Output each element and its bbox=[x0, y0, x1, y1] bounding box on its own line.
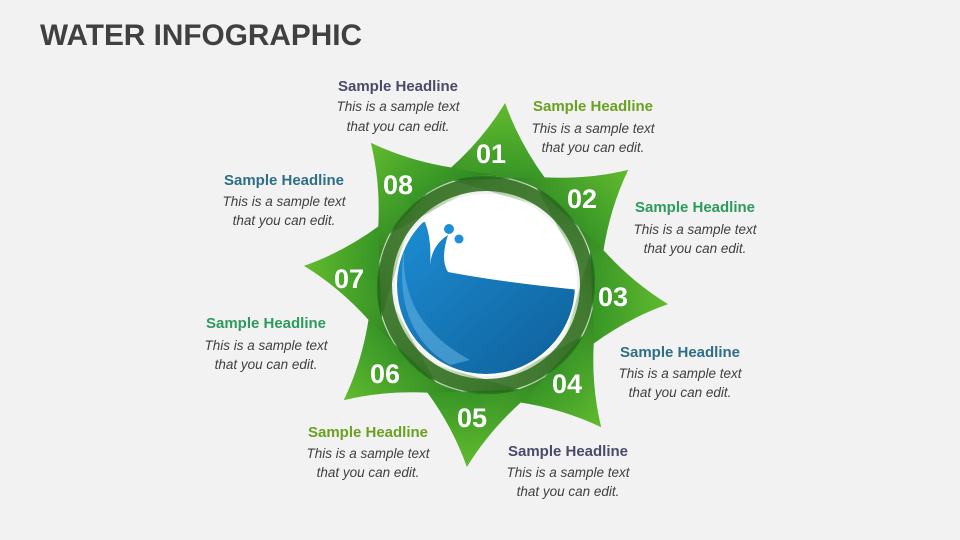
text block 06: that you can edit. bbox=[317, 465, 419, 480]
text block 07 bbox=[204, 315, 329, 372]
text block 03: Sample Headline bbox=[635, 199, 755, 216]
text block 06: This is a sample text bbox=[306, 446, 431, 461]
text block 07: This is a sample text bbox=[204, 338, 329, 353]
text block 06 bbox=[306, 424, 431, 480]
text block 04 bbox=[618, 344, 743, 400]
numbers: 08 bbox=[383, 170, 413, 200]
text block 01: Sample Headline bbox=[338, 78, 458, 95]
text block 05: Sample Headline bbox=[508, 443, 628, 460]
text block 01 bbox=[336, 78, 461, 134]
text block 08 bbox=[222, 172, 347, 228]
text block 01: This is a sample text bbox=[336, 99, 461, 114]
numbers: 02 bbox=[567, 184, 597, 214]
numbers: 06 bbox=[370, 359, 400, 389]
text block 04: This is a sample text bbox=[618, 366, 743, 381]
text block 08: This is a sample text bbox=[222, 194, 347, 209]
star graphic bbox=[292, 91, 680, 479]
text block 04: that you can edit. bbox=[629, 385, 731, 400]
text block 02: Sample Headline bbox=[533, 98, 653, 115]
text block 07: that you can edit. bbox=[215, 357, 317, 372]
numbers: 04 bbox=[552, 369, 582, 399]
text block 02: This is a sample text bbox=[531, 121, 656, 136]
text block 05: that you can edit. bbox=[517, 484, 619, 499]
text block 05 bbox=[506, 443, 631, 499]
text block 06: Sample Headline bbox=[308, 424, 428, 441]
numbers: 01 bbox=[476, 139, 506, 169]
text block 04: Sample Headline bbox=[620, 344, 740, 361]
text block 02: that you can edit. bbox=[542, 140, 644, 155]
text block 01: that you can edit. bbox=[347, 119, 449, 134]
numbers: 07 bbox=[334, 264, 364, 294]
numbers bbox=[334, 139, 628, 433]
text block 08: Sample Headline bbox=[224, 172, 344, 189]
text block 02 bbox=[531, 98, 656, 155]
text block 07: Sample Headline bbox=[206, 315, 326, 332]
text block 05: This is a sample text bbox=[506, 465, 631, 480]
text block 08: that you can edit. bbox=[233, 213, 335, 228]
title: WATER INFOGRAPHIC bbox=[40, 19, 362, 52]
numbers: 03 bbox=[598, 282, 628, 312]
text block 03 bbox=[633, 199, 758, 256]
icon: water wave bbox=[397, 222, 575, 374]
numbers: 05 bbox=[457, 403, 487, 433]
text block 03: that you can edit. bbox=[644, 241, 746, 256]
text block 03: This is a sample text bbox=[633, 222, 758, 237]
